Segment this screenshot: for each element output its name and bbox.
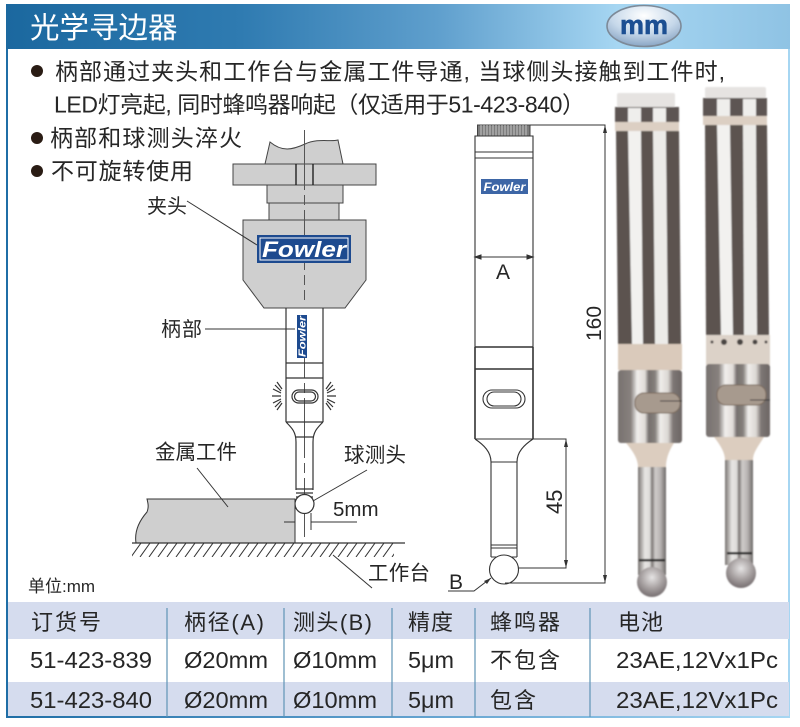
dimension: 160: 160 — [583, 306, 606, 341]
feature 3: 不可旋转使用 — [51, 158, 193, 184]
usage diagram — [132, 130, 430, 588]
label: worktable: 工作台 — [368, 562, 430, 585]
dimension: 160 — [505, 125, 607, 583]
feature 1 line 1: 柄部通过夹头和工作台与金属工件导通, 当球侧头接触到工件时, — [55, 58, 725, 84]
center line — [304, 130, 306, 537]
label: chuck: 夹头 — [147, 195, 187, 218]
dimension: B — [448, 571, 491, 594]
technical drawing — [448, 125, 607, 594]
photo: right edge finder — [703, 87, 770, 588]
table row 51-423-840 — [30, 687, 778, 713]
dimension: 5mm — [284, 498, 379, 538]
label: ball probe: 球测头 — [344, 444, 406, 467]
dimension: A — [475, 255, 533, 284]
dimension: A: A — [496, 261, 510, 284]
table row 51-423-839 — [30, 647, 778, 673]
table header row: 电池 — [618, 610, 663, 635]
dimension: 45: 45 — [542, 490, 567, 514]
table row 51-423-840: Ø20mm — [184, 687, 268, 713]
table row 51-423-839: 5μm — [408, 647, 454, 673]
feature 1 line 2: LED灯亮起, 同时蜂鸣器响起（仅适用于51-423-840） — [54, 92, 585, 118]
table backgrounds — [8, 602, 789, 716]
title: 光学寻边器 — [30, 12, 178, 45]
body outline — [475, 136, 533, 584]
Fowler logo on chuck: Fowler — [262, 237, 348, 262]
table header row: 柄径(A) — [184, 610, 264, 635]
table row 51-423-840: Ø10mm — [293, 687, 377, 713]
photo: left edge finder — [615, 93, 682, 597]
shank and probe — [286, 308, 323, 514]
table row 51-423-839: 23AE,12Vx1Pc — [616, 647, 778, 673]
Fowler logo on chuck — [257, 235, 351, 263]
knurled cap — [478, 125, 530, 136]
label: shank: 柄部 — [161, 318, 202, 341]
chuck assembly — [233, 140, 376, 308]
metal workpiece — [136, 499, 295, 543]
table row 51-423-839: Ø20mm — [184, 647, 268, 673]
table header row: 精度 — [408, 610, 453, 635]
table row 51-423-839: 不包含 — [490, 648, 560, 673]
table row 51-423-840: 51-423-840 — [30, 687, 152, 713]
table header row: 蜂鸣器 — [490, 610, 560, 635]
dimension: 45 — [518, 439, 568, 568]
column dividers — [167, 608, 590, 717]
feature 2: 柄部和球测头淬火 — [50, 125, 242, 151]
table row 51-423-840: 23AE,12Vx1Pc — [616, 687, 778, 713]
table row 51-423-839: 51-423-839 — [30, 647, 152, 673]
vent holes — [710, 339, 768, 345]
Fowler logo on shank: Fowler — [298, 315, 308, 357]
table header row — [31, 610, 663, 635]
dimension: 5mm: 5mm — [333, 498, 379, 521]
icon: LED light rays — [272, 382, 336, 410]
specification table — [8, 602, 789, 717]
badge: mm unit: mm — [620, 10, 668, 40]
table header row: 订货号 — [31, 610, 101, 635]
feature list — [31, 58, 725, 184]
Fowler logo on body: Fowler — [484, 180, 527, 194]
dimension: B: B — [449, 571, 463, 594]
table row 51-423-839: Ø10mm — [293, 647, 377, 673]
label: metal workpiece: 金属工件 — [155, 441, 237, 464]
header band — [6, 4, 790, 49]
unit note: 单位:mm — [28, 577, 95, 596]
table row 51-423-840: 包含 — [490, 688, 536, 713]
table header row: 测头(B) — [293, 610, 372, 635]
badge: mm unit — [607, 6, 681, 46]
table row 51-423-840: 5μm — [408, 687, 454, 713]
worktable — [132, 543, 405, 557]
